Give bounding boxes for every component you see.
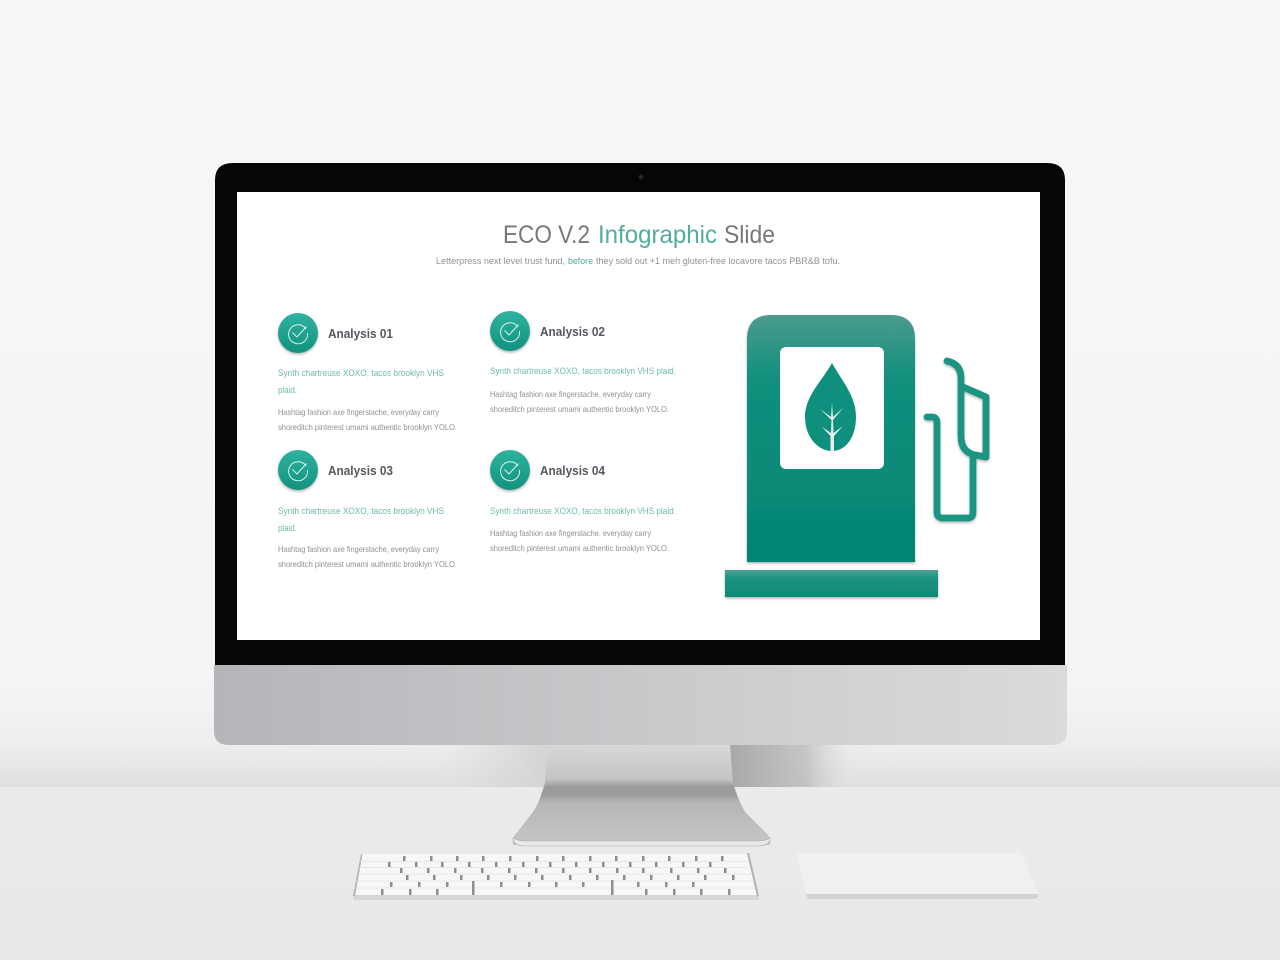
keyboard [353, 853, 759, 900]
subtitle: they sold out +1 meh gluten-free locavore tacos PBR&B tofu. [596, 256, 840, 266]
body text 04 [490, 528, 669, 553]
webcam [639, 175, 643, 179]
pump base [725, 570, 938, 597]
subtitle: Letterpress next level trust fund, [436, 256, 565, 266]
monitor [214, 163, 1067, 745]
title: Slide [724, 221, 775, 249]
green text 01: plaid. [278, 385, 297, 396]
icon: check circle 02 [490, 311, 530, 351]
green text 04: Synth chartreuse XOXO, tacos brooklyn VHS plaid. [490, 506, 676, 517]
icon: fuel pump with leaf [725, 315, 986, 597]
subtitle: before [568, 256, 593, 266]
green text 02: Synth chartreuse XOXO, tacos brooklyn VHS plaid. [490, 366, 676, 377]
panel: analysis 03 [278, 450, 457, 569]
body text 01: shoreditch pinterest umami authentic brooklyn YOLO. [278, 422, 457, 432]
pump body [747, 315, 915, 562]
green text 03: Synth chartreuse XOXO, tacos brooklyn VHS [278, 506, 444, 517]
body text 01: Hashtag fashion axe fingerstache, everyday carry [278, 407, 440, 417]
panel: analysis 04 [490, 450, 676, 553]
body text 02 [490, 389, 669, 414]
green text 01 [278, 368, 444, 396]
keyboard body [353, 854, 757, 896]
leaf [805, 363, 856, 451]
title [503, 221, 775, 249]
body text 04: shoreditch pinterest umami authentic brooklyn YOLO. [490, 543, 669, 553]
title: Infographic [598, 221, 717, 249]
stand shadow on wall, left [440, 745, 548, 787]
title: ECO V.2 [503, 221, 590, 249]
icon: check circle 03 [278, 450, 318, 490]
body text 02: Hashtag fashion axe fingerstache, everyday carry [490, 389, 652, 399]
heading 01: Analysis 01 [328, 327, 393, 341]
key row lines [355, 862, 755, 888]
screen [237, 192, 1040, 640]
icon: check circle 01 [278, 313, 318, 353]
desk surface [0, 787, 1280, 960]
body text 01 [278, 407, 457, 432]
stand shadow on wall, right [730, 745, 855, 787]
subtitle [436, 256, 840, 266]
monitor bezel [215, 163, 1065, 665]
heading 02: Analysis 02 [540, 325, 605, 339]
body text 03 [278, 544, 457, 569]
body text 04: Hashtag fashion axe fingerstache, everyday carry [490, 528, 652, 538]
heading 03: Analysis 03 [328, 464, 393, 478]
monitor chin [214, 665, 1067, 745]
panel: analysis 02 [490, 311, 676, 414]
body text 03: shoreditch pinterest umami authentic brooklyn YOLO. [278, 559, 457, 569]
green text 01: Synth chartreuse XOXO, tacos brooklyn VHS [278, 368, 444, 379]
body text 03: Hashtag fashion axe fingerstache, everyday carry [278, 544, 440, 554]
icon: check circle 04 [490, 450, 530, 490]
key gaps [381, 856, 734, 895]
panel: analysis 01 [278, 313, 457, 432]
monitor stand [513, 745, 770, 846]
heading 04: Analysis 04 [540, 464, 605, 478]
pump window [780, 347, 884, 469]
green text 03 [278, 506, 444, 534]
green text 03: plaid. [278, 523, 297, 534]
fuel hose and nozzle [927, 361, 986, 518]
trackpad [797, 853, 1038, 899]
body text 02: shoreditch pinterest umami authentic brooklyn YOLO. [490, 404, 669, 414]
